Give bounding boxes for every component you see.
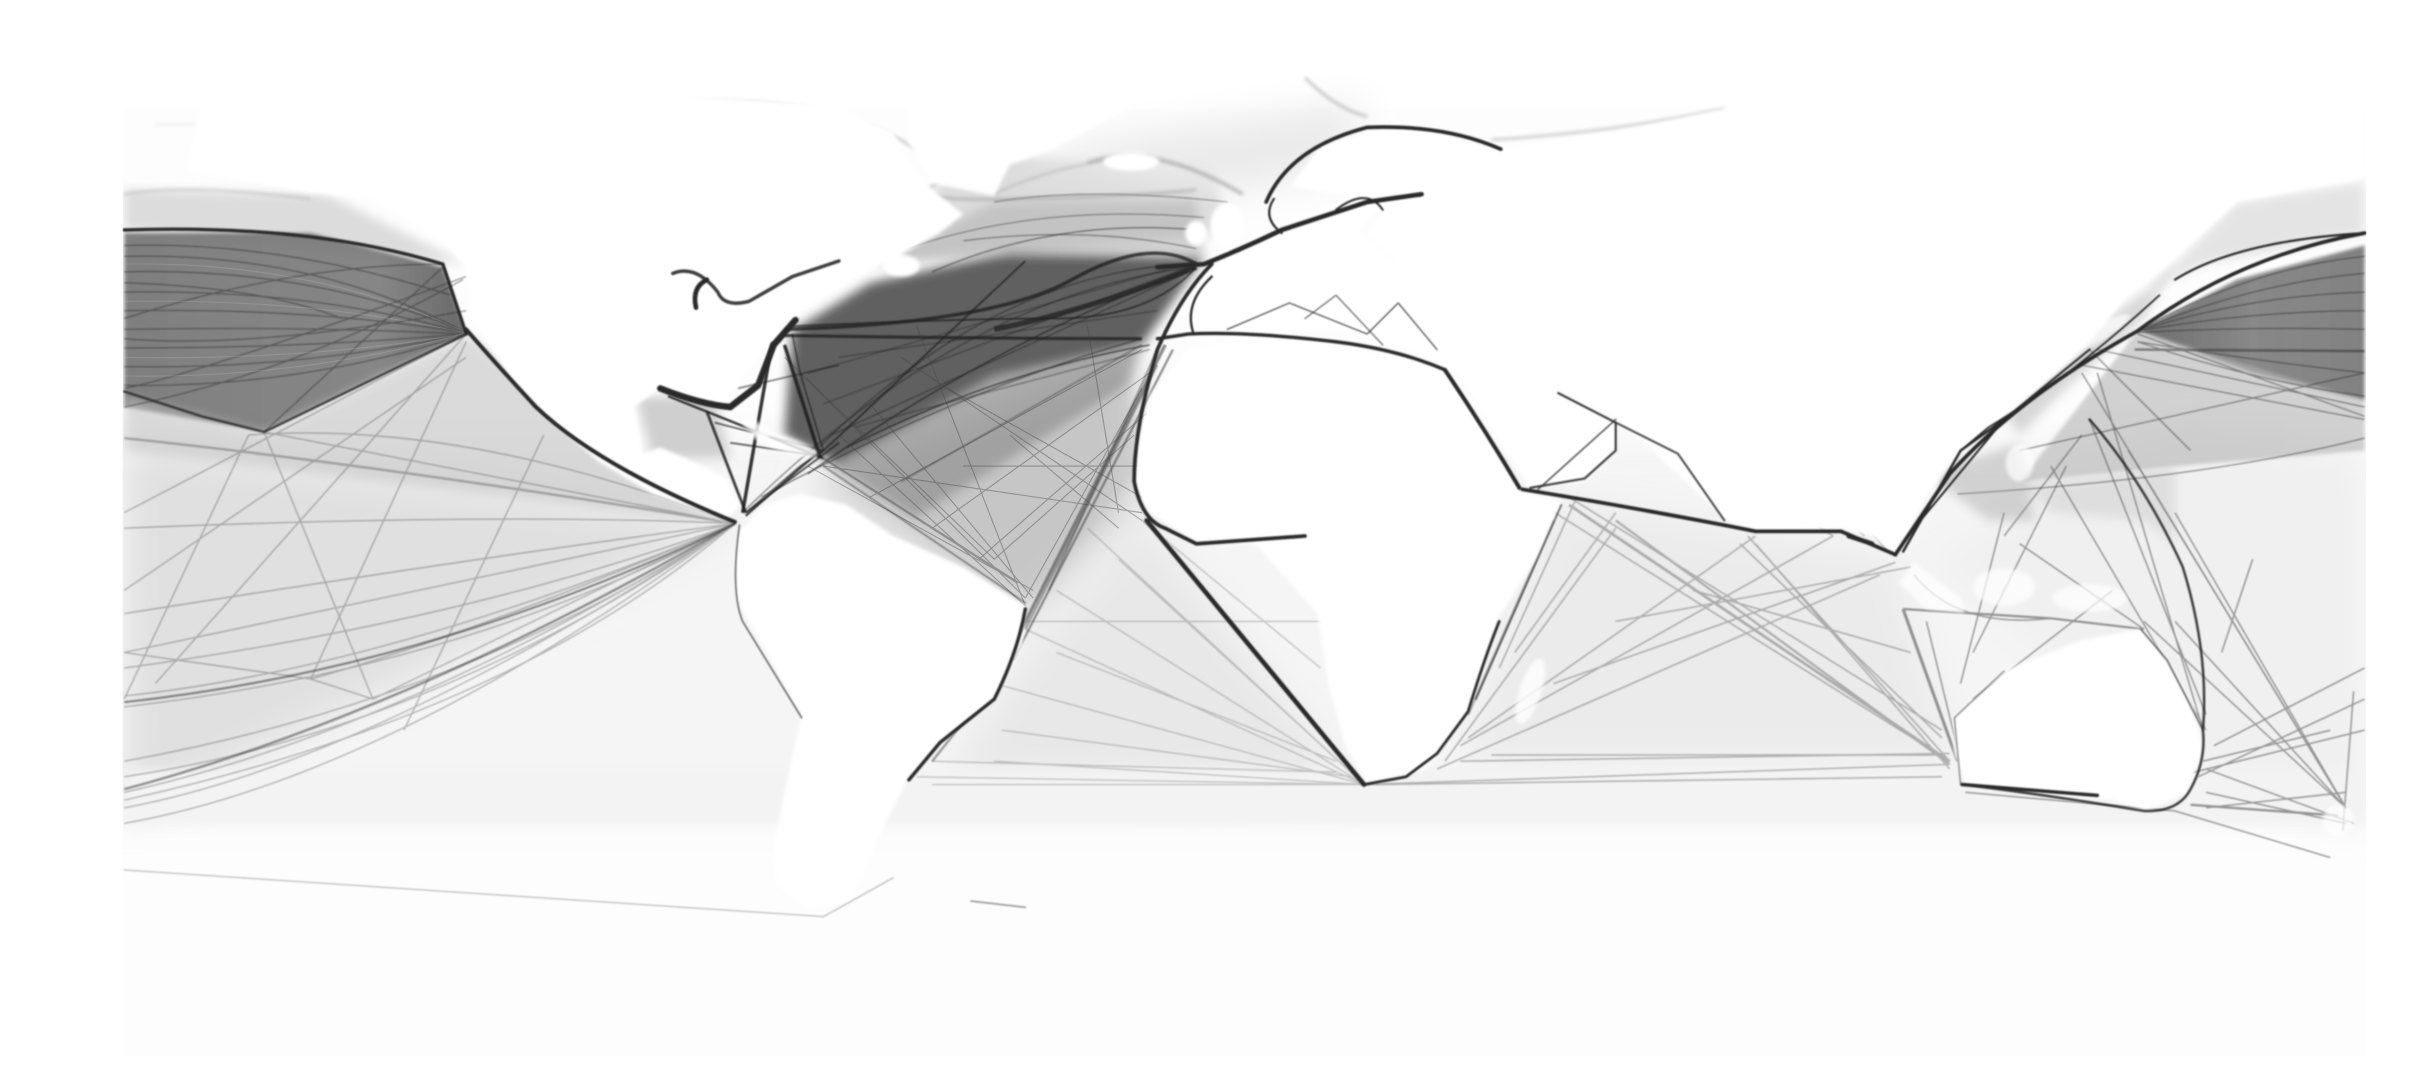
Africa xyxy=(1134,339,1561,783)
north Pacific band, west half xyxy=(124,233,735,524)
Channel to Gibraltar xyxy=(1157,194,1422,267)
Cape around Africa xyxy=(1364,621,1499,785)
Indian Ocean fan xyxy=(1366,498,1951,786)
east Asia islands haze xyxy=(1926,264,2175,520)
Caribbean and US east coast network xyxy=(668,261,1025,516)
India south block xyxy=(1616,342,1942,531)
ocean haze xyxy=(122,104,2366,828)
Suez, Red Sea xyxy=(1445,370,1519,488)
US west coast to Panama xyxy=(466,329,735,522)
north Pacific band, east texture lines xyxy=(1957,256,2365,494)
north Atlantic corridor xyxy=(785,199,1204,598)
Australia coast xyxy=(1962,419,2204,811)
US east coast xyxy=(660,320,795,407)
South America east coast xyxy=(909,609,1025,780)
major coast-hugging routes xyxy=(124,127,2365,917)
Atlantic north-south corridor xyxy=(932,345,1173,761)
Atlantic scattered crossing lines xyxy=(785,326,1157,606)
Panama Pacific fan xyxy=(124,334,735,823)
north Pacific band, west texture lines xyxy=(124,245,466,432)
north Pacific band, east half xyxy=(2020,245,2365,544)
South Atlantic fan to Cape xyxy=(917,520,1364,785)
world shipping routes density map xyxy=(122,76,2366,918)
north Pacific band, west highlight lines xyxy=(124,264,463,376)
Hudson Bay xyxy=(673,261,839,303)
Mediterranean xyxy=(1157,333,1445,370)
South America xyxy=(735,494,1025,909)
South Pacific lower route xyxy=(124,870,893,917)
map content xyxy=(122,76,2366,918)
Newfoundland and Caribbean islands xyxy=(882,255,920,277)
Iberia / West Africa xyxy=(1134,264,1305,544)
New Zealand xyxy=(2323,805,2354,836)
Madagascar xyxy=(1509,655,1551,727)
Asia to Australia network xyxy=(1903,350,2365,858)
Australia xyxy=(1954,629,2203,811)
Trans-Pacific north arc xyxy=(124,229,466,334)
Panama dark west approach xyxy=(124,524,735,789)
North America xyxy=(186,78,963,520)
Eurasia west xyxy=(1187,196,1616,488)
Iceland xyxy=(1103,152,1159,171)
Singapore to Japan xyxy=(1895,233,2365,555)
Eurasia east xyxy=(1289,62,2365,553)
Arabian Sea to Malacca xyxy=(1522,489,1895,555)
land masses xyxy=(186,62,2365,909)
Borneo and Indonesia xyxy=(1898,562,1965,614)
British Isles xyxy=(1210,204,1244,247)
Arctic and northern haze lines xyxy=(124,78,1724,199)
north Atlantic route lines xyxy=(743,194,1227,513)
Gulf xyxy=(1530,393,1616,488)
Greenland xyxy=(909,62,1305,196)
